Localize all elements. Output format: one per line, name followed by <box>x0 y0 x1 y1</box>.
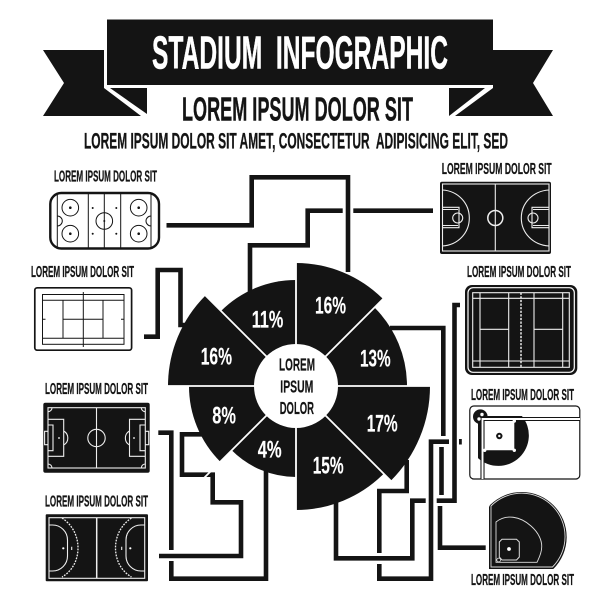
hockey item <box>50 169 159 248</box>
connector: 15 percent slice <box>336 500 426 558</box>
percent values: 4% <box>258 436 282 463</box>
soccer label: LOREM IPSUM DOLOR SIT <box>45 381 148 398</box>
percent values: 13% <box>360 346 391 373</box>
center hub: LOREM <box>279 355 315 375</box>
pie chart <box>164 255 434 515</box>
connector: soccer to pie <box>158 433 241 556</box>
icon: volleyball court <box>465 285 577 375</box>
percent values: 8% <box>212 402 236 429</box>
icon: tennis court <box>35 288 132 350</box>
ribbon right tail <box>449 50 553 116</box>
percent values: 15% <box>313 452 344 479</box>
percent values: 16% <box>315 292 346 319</box>
percent values: 17% <box>367 410 398 437</box>
basketball item <box>440 161 552 254</box>
ribbon left tail <box>43 50 147 116</box>
tennis label: LOREM IPSUM DOLOR SIT <box>31 264 134 281</box>
connector: 13 percent slice <box>390 328 443 495</box>
icon: hockey rink <box>50 193 159 248</box>
icon: soccer field <box>43 403 150 473</box>
connector dash <box>459 439 462 444</box>
percent values: 16% <box>201 343 232 370</box>
connector: baseball field <box>440 506 486 548</box>
soccer item <box>43 381 150 473</box>
connector: basketball to pie <box>250 211 433 292</box>
ribbon main band <box>107 20 493 85</box>
volleyball item <box>465 264 577 375</box>
connector lines <box>144 177 486 579</box>
connector: 17 percent slice <box>379 442 449 579</box>
icon: handball court <box>46 514 148 581</box>
percent values: 11% <box>252 306 283 333</box>
center hub: DOLOR <box>280 398 314 418</box>
handball item <box>45 494 148 581</box>
pie slices <box>164 255 434 515</box>
center hub: IPSUM <box>280 376 313 396</box>
handball label: LOREM IPSUM DOLOR SIT <box>45 494 148 510</box>
connector: handball to pie <box>171 470 266 579</box>
subtitle: LOREM IPSUM DOLOR SIT <box>182 92 413 128</box>
icon: baseball diamond <box>470 406 580 479</box>
baseball field item <box>471 492 574 589</box>
tennis item <box>31 264 134 350</box>
baseball diamond item <box>470 387 580 479</box>
center hub <box>254 344 338 428</box>
icon: basketball court <box>440 182 551 254</box>
connector: volleyball court <box>437 305 460 501</box>
title ribbon <box>43 20 553 116</box>
connector: tennis to pie <box>144 270 190 337</box>
connector: hockey to pie <box>166 177 348 272</box>
hockey label: LOREM IPSUM DOLOR SIT <box>54 169 157 186</box>
percent values <box>201 292 398 479</box>
baseball field icon <box>489 492 567 569</box>
